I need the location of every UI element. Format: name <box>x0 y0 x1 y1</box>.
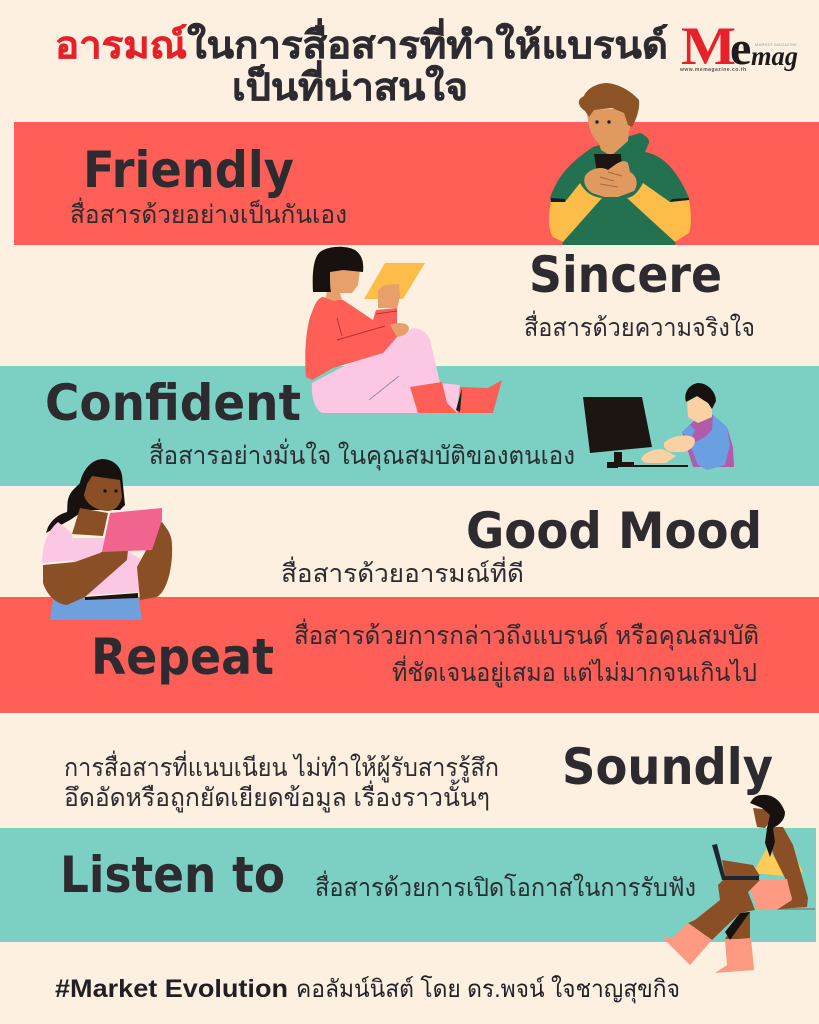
title: อารมณ์ในการสื่อสารที่ทำให้แบรนด์ <box>55 18 668 67</box>
band: Friendly <box>14 122 819 245</box>
heading: Soundly: Soundly <box>562 738 773 796</box>
heading: Confident: Confident <box>45 374 301 432</box>
text: Sincere description: สื่อสารด้วยความจริงใจ <box>524 310 755 342</box>
text: Soundly description: อึดอัดหรือถูกยัดเยียดข้อมูล เรื่องราวนั้นๆ <box>64 779 490 813</box>
band: Repeat <box>0 597 819 713</box>
illustration: boy at computer <box>583 383 734 470</box>
logo: Memag: MARKET MAGAZINE <box>755 42 797 47</box>
title: เป็นที่น่าสนใจ <box>232 60 468 109</box>
heading: Good Mood: Good Mood <box>466 502 762 560</box>
title <box>55 18 668 109</box>
illustration: man with phone <box>549 83 691 245</box>
footer text: #Market Evolution <box>55 975 288 1003</box>
heading: Listen to: Listen to <box>60 846 285 904</box>
heading: Sincere: Sincere <box>529 246 722 304</box>
text: Soundly description: การสื่อสารที่แนบเนียน ไม่ทำให้ผู้รับสารรู้สึก <box>64 750 499 783</box>
text: Confident description: สื่อสารอย่างมั่นใจ ในคุณสมบัติของตนเอง <box>149 438 575 471</box>
text: Good Mood description: สื่อสารด้วยอารมณ์ที่ดี <box>281 556 524 588</box>
logo: Memag: www.memagazine.co.th <box>679 67 746 73</box>
logo: Memag: M <box>681 16 736 76</box>
illustration: girl with pink tablet <box>42 459 172 620</box>
text: Listen to description: สื่อสารด้วยการเปิดโอกาสในการรับฟัง <box>315 870 696 902</box>
text: Repeat description: ที่ชัดเจนอยู่เสมอ แต่ไม่มากจนเกินไป <box>392 655 757 688</box>
band: Listen to <box>0 828 816 942</box>
text: Soundly description <box>64 750 499 813</box>
logo: Memag: e <box>730 22 751 75</box>
text: Repeat description: สื่อสารด้วยการกล่าวถึงแบรนด์ หรือคุณสมบัติ <box>294 618 759 651</box>
logo: Memag <box>679 16 798 76</box>
illustration: woman with tablet sitting <box>305 247 502 413</box>
text: Repeat description <box>294 618 759 688</box>
footer text: คอลัมน์นิสต์ โดย ดร.พจน์ ใจชาญสุขกิจ <box>296 975 680 1004</box>
heading: Friendly: Friendly <box>83 141 294 199</box>
illustration: woman with laptop <box>662 795 815 973</box>
band: Confident <box>0 366 819 486</box>
heading: Repeat: Repeat <box>91 628 274 686</box>
text: Friendly description: สื่อสารด้วยอย่างเป็นกันเอง <box>70 197 347 229</box>
footer text <box>55 975 680 1004</box>
logo: Memag: mag <box>751 41 798 71</box>
